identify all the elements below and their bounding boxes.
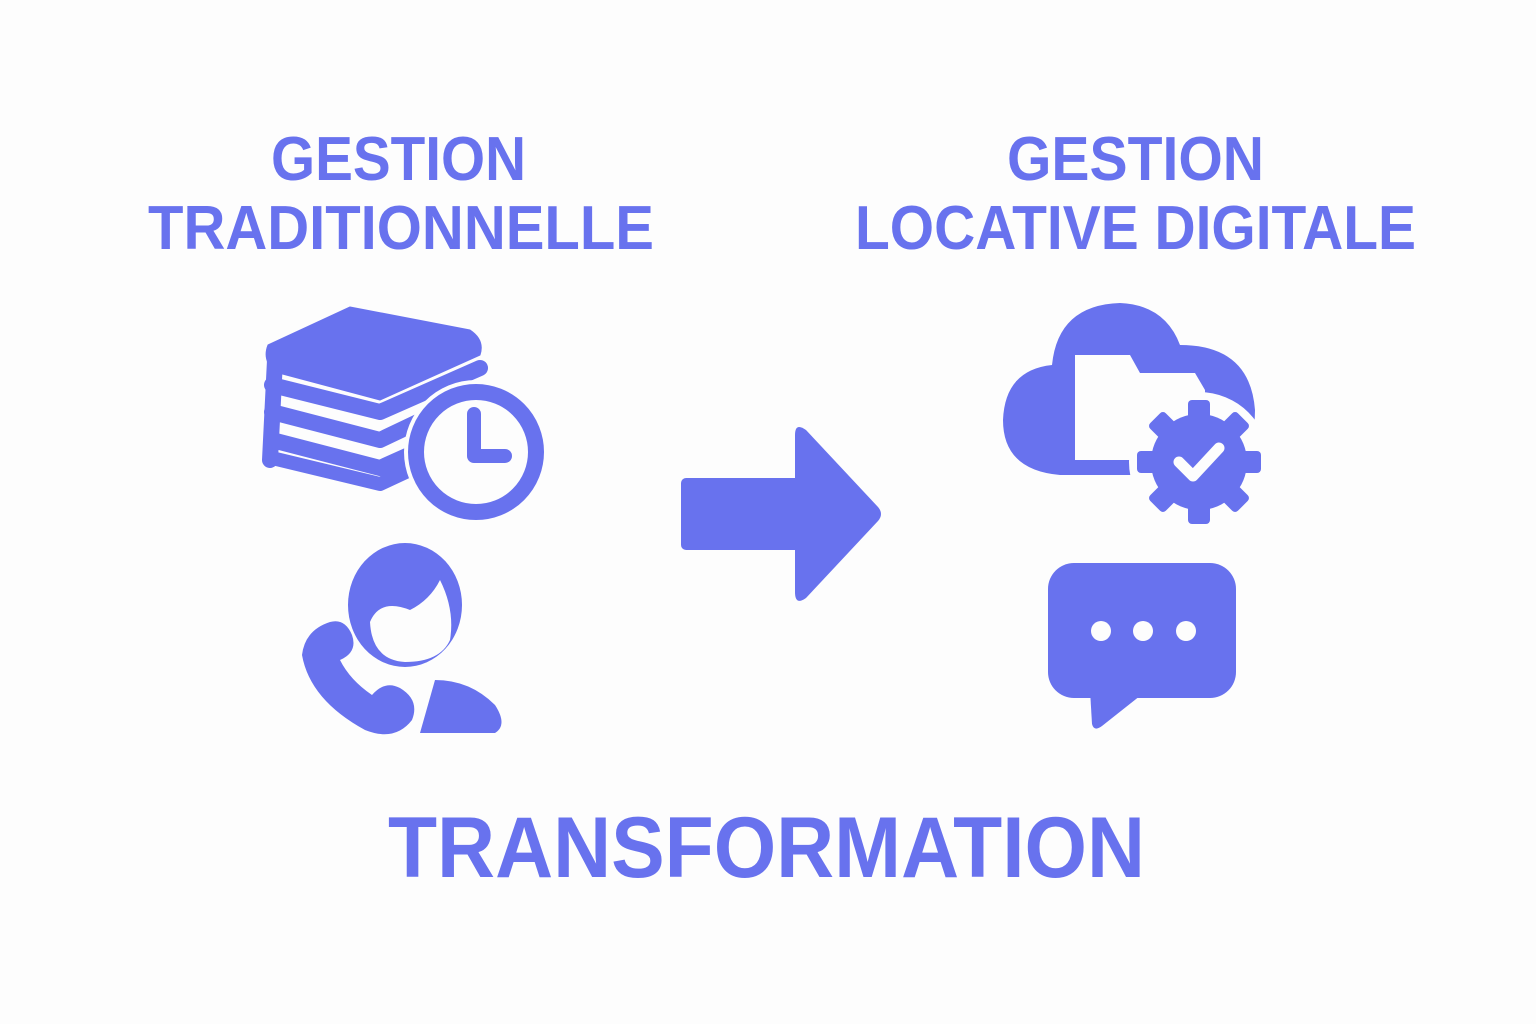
- arrow: [681, 427, 881, 601]
- heading: gestion traditionnelle: TRADITIONNELLE: [148, 194, 654, 263]
- heading: gestion locative digitale: LOCATIVE DIGITALE: [855, 194, 1416, 263]
- icon: chat bubble: [1048, 563, 1236, 729]
- heading: gestion locative digitale: [855, 125, 1416, 263]
- heading: gestion locative digitale: GESTION: [1007, 125, 1264, 194]
- title: transformation: TRANSFORMATION: [388, 800, 1145, 896]
- heading: gestion traditionnelle: GESTION: [271, 125, 526, 194]
- icon: person on phone: [302, 543, 502, 734]
- icon: cloud with folder and gear: [1003, 303, 1269, 532]
- icon: books with clock: [266, 307, 548, 524]
- heading: gestion traditionnelle: [148, 125, 654, 263]
